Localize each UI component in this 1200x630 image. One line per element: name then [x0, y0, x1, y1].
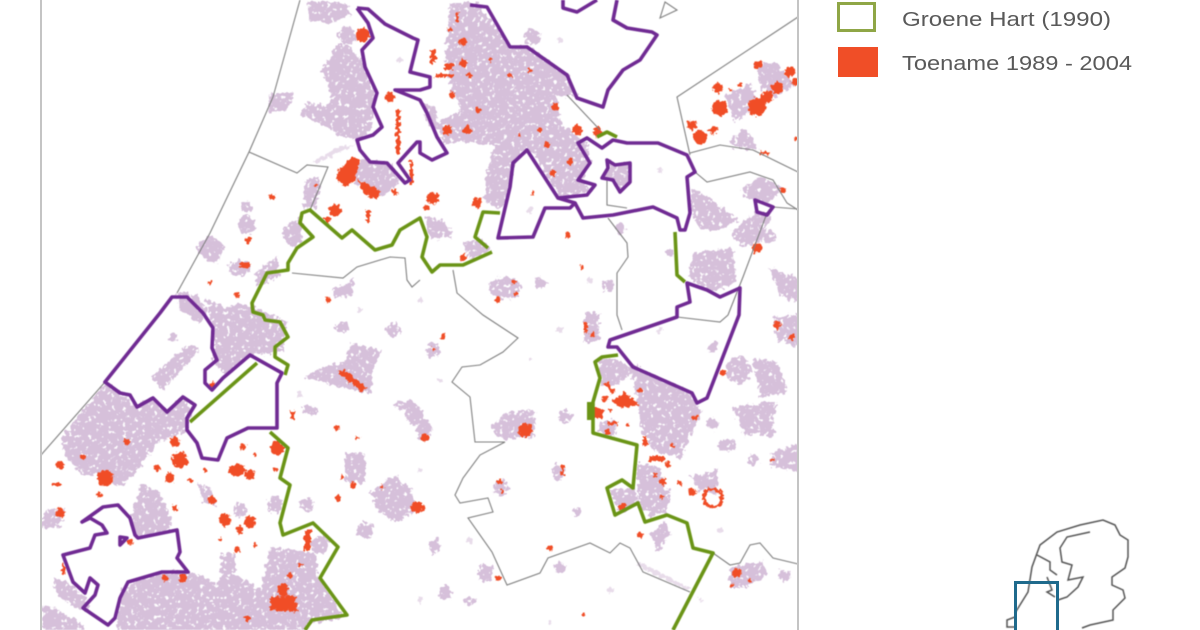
- map panel: [41, 0, 800, 630]
- locator rectangle: [1016, 582, 1058, 630]
- Groene Hart boundary (green): [190, 132, 713, 630]
- municipal boundaries (grey): [41, 0, 798, 592]
- map frame right edge: [797, 0, 799, 630]
- country outline: [1007, 520, 1128, 628]
- faint scattered settlement: [297, 37, 723, 624]
- ring of increase: [704, 489, 722, 507]
- purple boundaries: [63, 0, 773, 625]
- locator map of the Netherlands: [1007, 520, 1128, 630]
- map frame left edge: [40, 0, 42, 630]
- legend label: Groene Hart: Groene Hart (1990): [902, 9, 1111, 31]
- increase 1989-2004 (red): [52, 12, 799, 621]
- legend: [838, 4, 1132, 77]
- legend label: Toename: Toename 1989 - 2004: [902, 53, 1132, 75]
- legend swatch: Groene Hart: [838, 4, 874, 30]
- urban area (lilac): [42, 2, 800, 630]
- legend swatch: Toename: [838, 47, 878, 77]
